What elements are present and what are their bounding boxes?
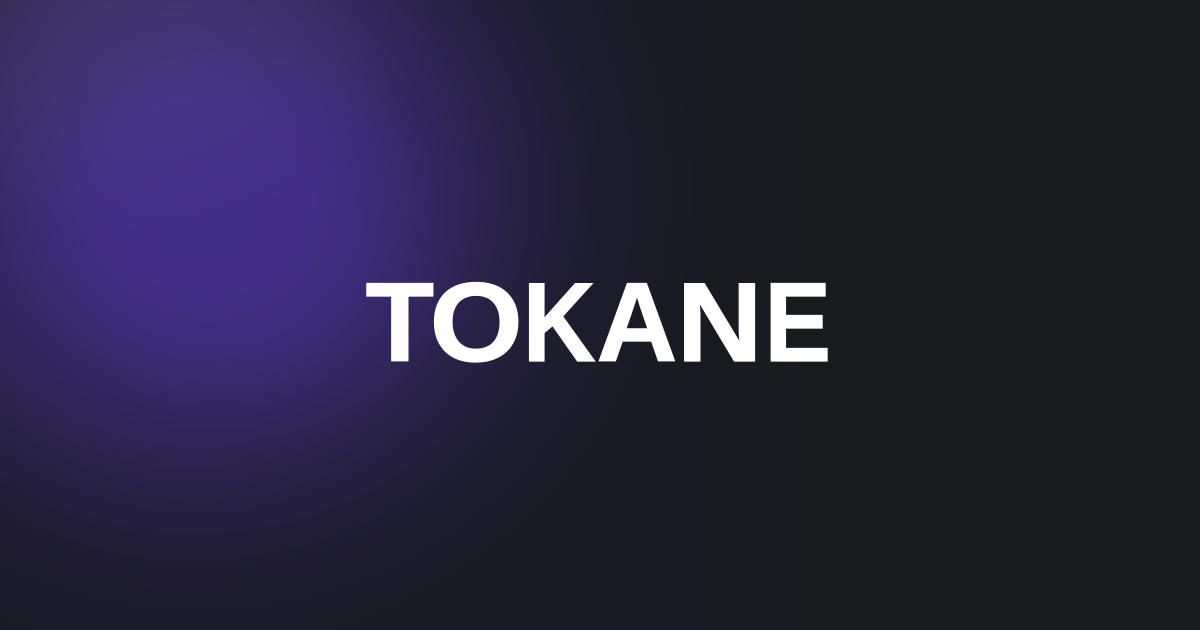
title: A [596,260,677,385]
title: N [677,261,763,385]
title: O [430,260,523,385]
title: E [764,261,831,385]
title: T [366,260,434,385]
title: K [523,260,595,385]
